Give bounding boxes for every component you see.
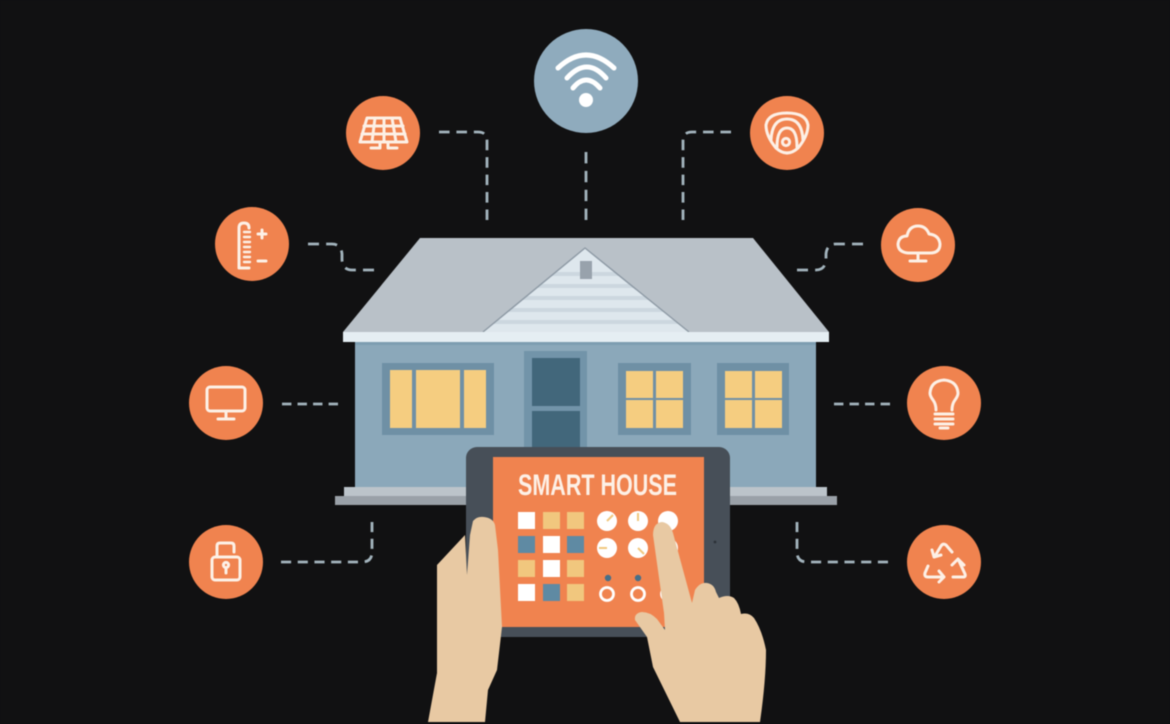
connector lines [281,132,890,562]
right window [717,363,789,435]
icon: light bulb [907,366,981,440]
right hand [635,522,766,722]
icon: security camera [750,96,824,170]
left hand [428,517,502,722]
fascia [343,332,829,342]
icon: cloud [881,208,955,282]
icon: recycle [907,525,981,599]
icon: padlock [189,525,263,599]
toggle rings [600,588,674,600]
dials [597,511,678,558]
roof [343,238,829,332]
left window [382,363,494,435]
icon: thermometer [215,207,289,281]
door [524,351,587,461]
steps [335,487,837,505]
house [335,238,837,505]
indicator dots [605,575,641,581]
tablet title: SMART HOUSE [518,469,677,502]
icon: wifi [534,29,638,133]
tablet [466,447,730,637]
button grid [518,512,584,601]
wall [355,342,816,488]
icon: solar panel [346,96,420,170]
middle window [618,363,691,435]
gable [480,248,690,332]
camera dot [714,541,716,543]
icon: monitor [189,366,263,440]
